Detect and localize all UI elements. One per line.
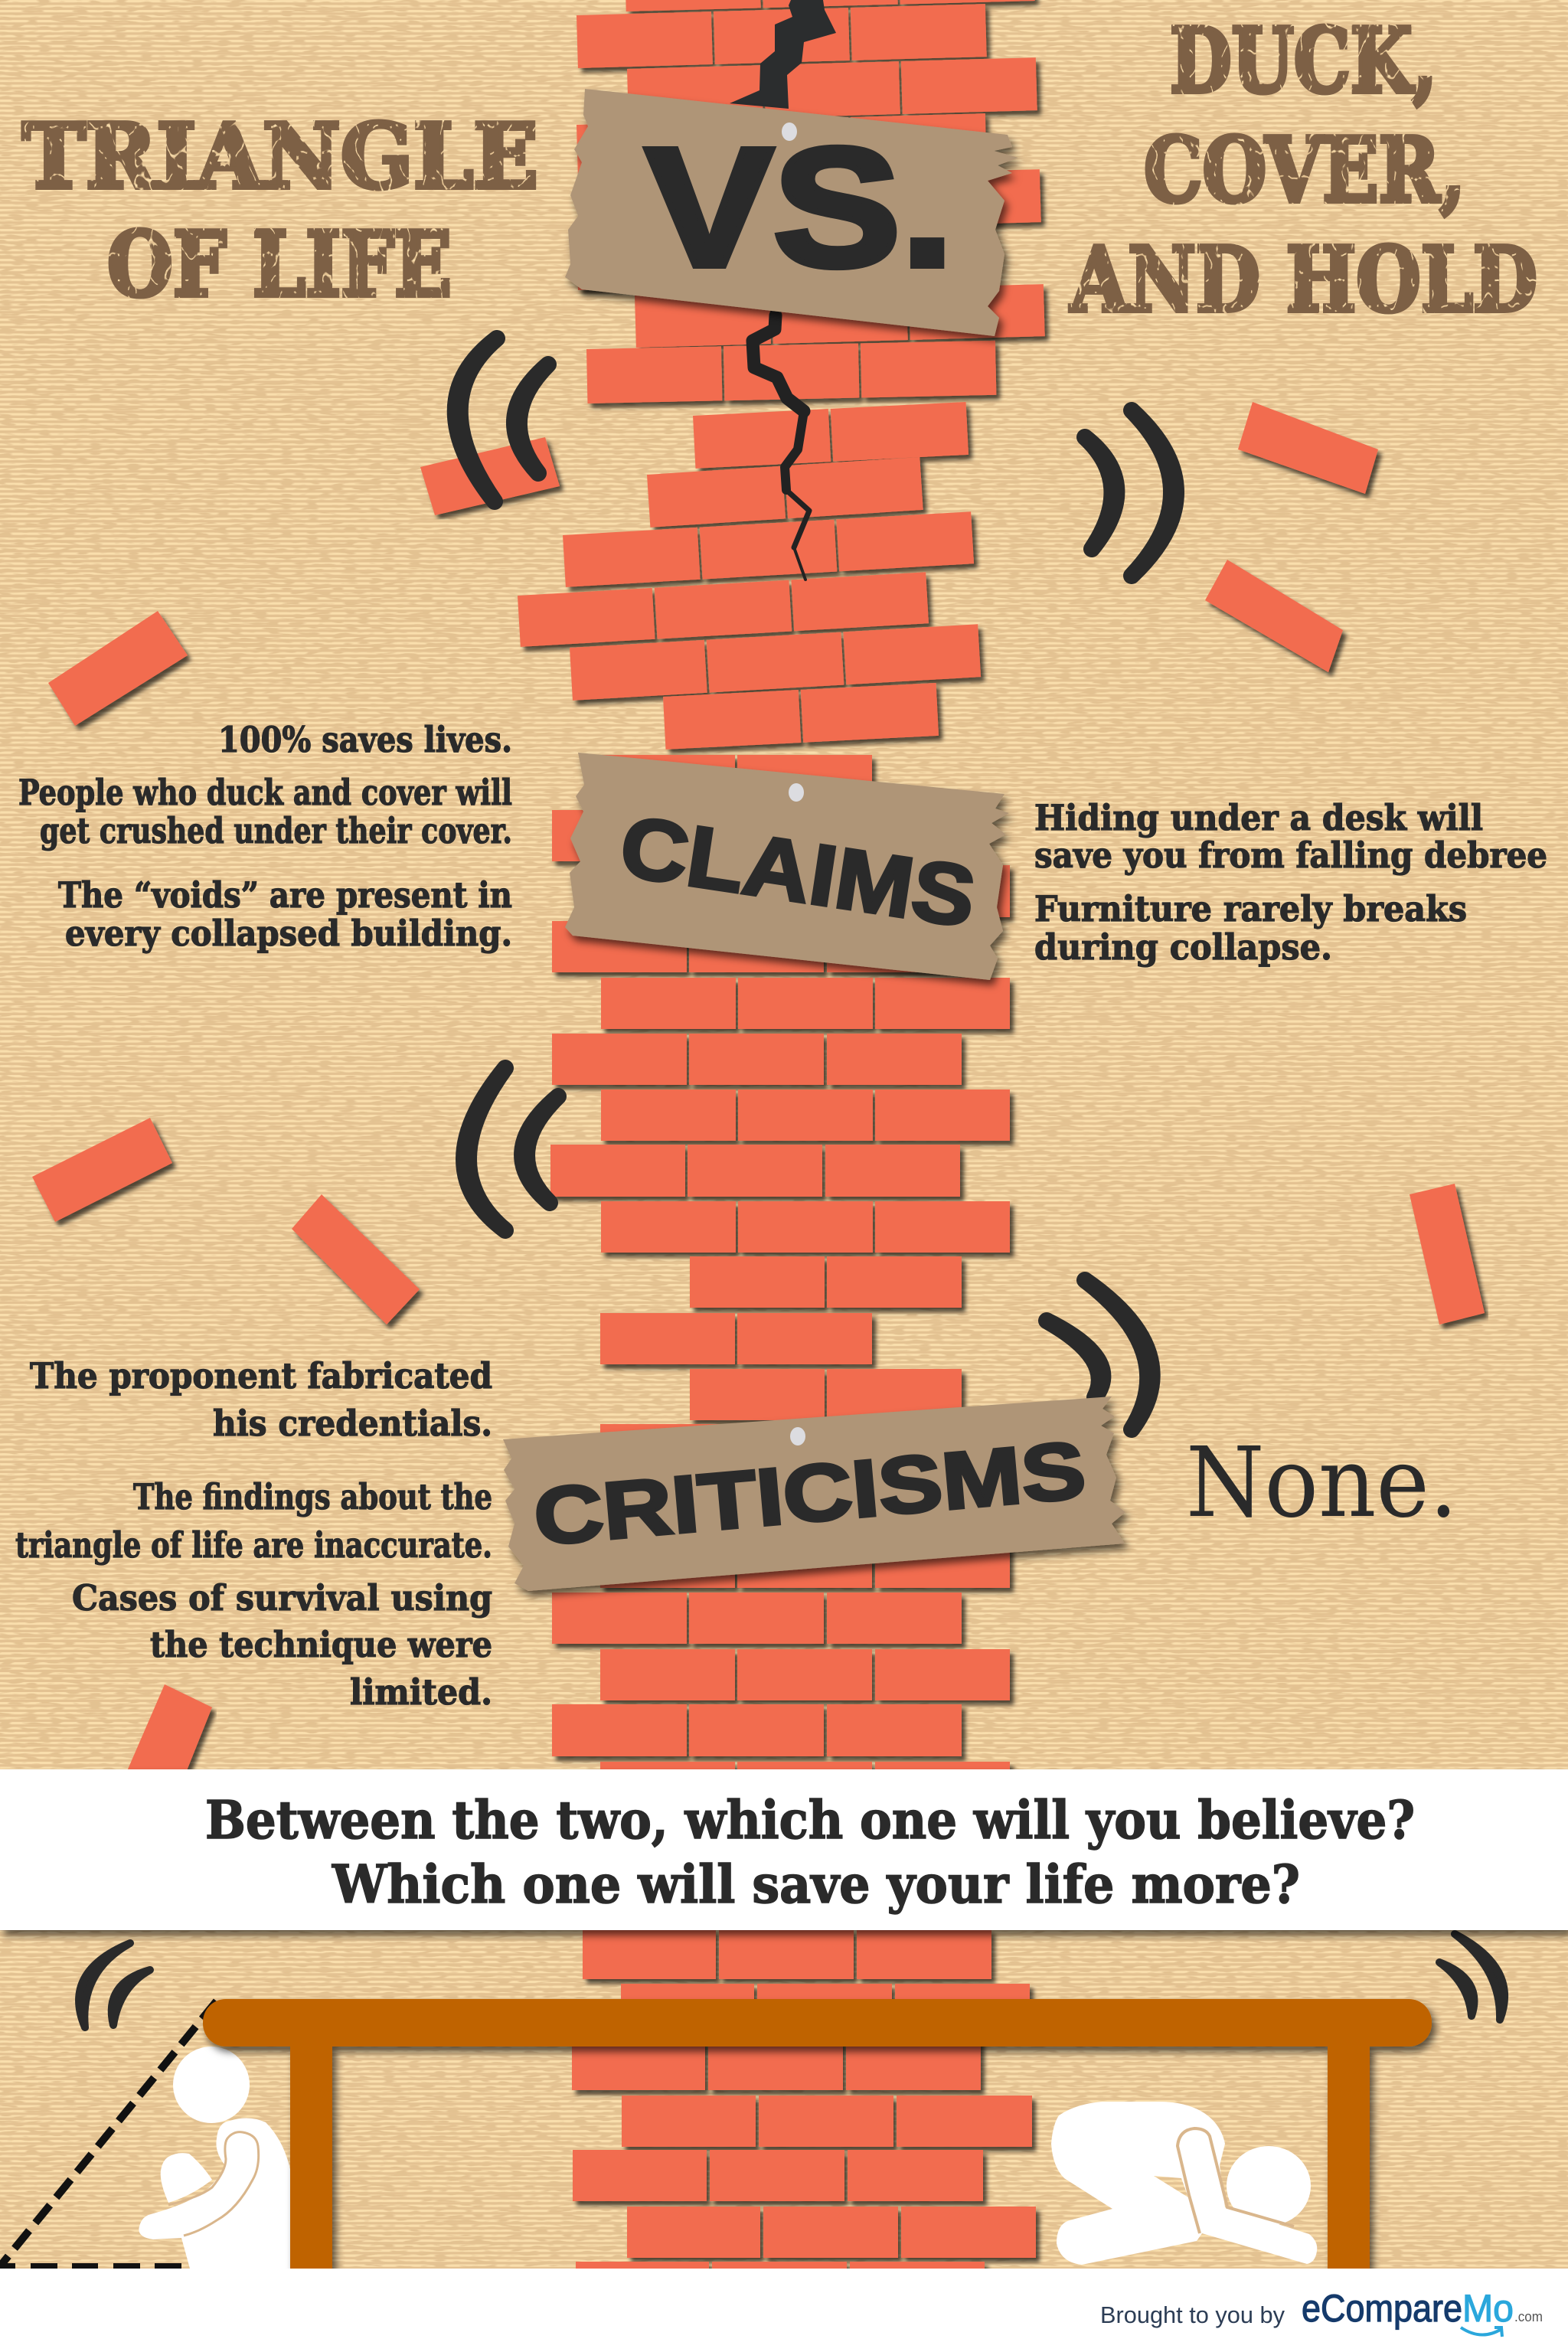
icon: shake marks top right	[1085, 410, 1176, 576]
icon: triangle of life dashed line	[0, 1999, 218, 2266]
loose brick: lower left	[125, 1684, 212, 1776]
heading: Triangle of Life: OF LIFE	[107, 213, 452, 317]
brick row	[573, 2150, 983, 2201]
brick row	[586, 341, 996, 403]
icon: shake marks middle right	[1047, 1280, 1152, 1429]
brick row	[577, 226, 987, 290]
text: Duck, Cover, and Hold claims	[1034, 797, 1547, 968]
loose brick: under left shake marks	[420, 437, 560, 515]
brick row	[600, 755, 872, 806]
brick row	[563, 511, 974, 587]
nail	[782, 122, 797, 141]
icon: shake marks bottom left	[79, 1943, 150, 2027]
question banner	[0, 1769, 1568, 1930]
brick row	[552, 1592, 962, 1644]
brick row	[600, 1762, 1010, 1813]
logo: eCompareMo: eCompare	[1302, 2287, 1462, 2330]
text: Triangle of Life claims	[18, 719, 512, 954]
brick row	[577, 113, 987, 178]
desk top	[203, 1999, 1432, 2047]
question banner: Which one will save your life more?	[332, 1854, 1300, 1916]
brick row	[601, 1201, 1010, 1253]
brick row	[552, 921, 962, 972]
text: Triangle of Life criticisms: The findings about the	[133, 1476, 492, 1517]
sign: Criticisms	[503, 1396, 1125, 1591]
text: Triangle of Life claims: People who duck and cover will	[18, 772, 512, 813]
brick row	[621, 1984, 1030, 2034]
sign label: VS.	[645, 113, 954, 302]
desk	[203, 1999, 1432, 2269]
text: Triangle of Life criticisms: limited.	[350, 1671, 492, 1713]
loose brick: middle left	[32, 1118, 172, 1222]
brick row	[572, 2039, 981, 2090]
brick row	[647, 457, 923, 528]
icon: shake marks bottom right	[1439, 1934, 1504, 2020]
brick wall: straight middle section	[550, 755, 1010, 1813]
heading: Triangle of Life: TRIANGLE	[22, 105, 538, 209]
brick row	[627, 57, 1037, 122]
text: Triangle of Life criticisms: his credentials.	[213, 1403, 492, 1444]
brick row	[625, 0, 1035, 11]
brick row	[552, 1034, 962, 1085]
brick row	[600, 1424, 872, 1475]
loose brick: upper left	[48, 611, 188, 726]
sign board	[565, 753, 1009, 980]
text: Triangle of Life criticisms	[15, 1355, 492, 1713]
brick wall: upper cracked section	[518, 0, 1045, 750]
text: Duck, Cover, and Hold claims: Furniture rarely breaks	[1034, 888, 1467, 929]
brick row	[622, 2096, 1032, 2147]
brought to you by: Brought to you by	[1100, 2301, 1285, 2328]
heading: Duck, Cover, and Hold	[1070, 9, 1537, 332]
question banner: Between the two, which one will you believe?	[205, 1790, 1415, 1851]
brick row	[601, 1089, 1010, 1141]
brick row	[552, 1481, 962, 1532]
brick row	[690, 1256, 962, 1308]
sign: VS	[565, 89, 1018, 336]
text: Triangle of Life claims: The “voids” are present in	[58, 874, 512, 916]
sign label: CLAIMS	[614, 798, 982, 946]
brick row	[631, 169, 1041, 234]
icon: person sitting beside the desk	[139, 2047, 290, 2269]
brick row	[550, 1145, 960, 1197]
brick row	[552, 1704, 962, 1756]
sign board	[565, 89, 1018, 336]
brick row	[627, 2207, 1036, 2258]
text: Duck, Cover, and Hold criticisms: None.	[1186, 1426, 1458, 1539]
icon: shake marks top left	[456, 338, 548, 501]
nail	[789, 783, 804, 802]
brick row	[600, 1649, 1010, 1700]
icon: shake marks middle left	[464, 1068, 558, 1230]
heading: Triangle of Life	[22, 105, 538, 317]
brick row	[663, 683, 939, 750]
brick row	[601, 978, 1010, 1029]
text: Triangle of Life criticisms: Cases of survival using	[72, 1577, 492, 1619]
crack: upper part of the wall	[730, 0, 836, 109]
nail	[790, 1427, 805, 1446]
brick row	[577, 4, 987, 68]
text: Duck, Cover, and Hold claims: Hiding under a desk will	[1034, 797, 1483, 838]
brick row	[693, 402, 969, 469]
brick row	[576, 2262, 985, 2285]
logo: eCompareMo: .com	[1514, 2309, 1543, 2324]
desk leg right	[1328, 2029, 1370, 2269]
brick row	[601, 865, 1010, 917]
sign label: CRITICISMS	[531, 1425, 1089, 1563]
loose brick: middle right	[1410, 1184, 1485, 1325]
loose brick: middle left tilted	[292, 1194, 420, 1325]
text: Triangle of Life criticisms: The proponent fabricated	[30, 1355, 492, 1396]
loose brick: upper right	[1238, 402, 1378, 494]
desk leg left	[290, 2029, 332, 2269]
footer strip	[0, 2269, 1568, 2352]
brick row	[518, 572, 929, 647]
brick row	[600, 1313, 872, 1364]
heading: Duck, Cover, and Hold: COVER,	[1144, 119, 1465, 223]
brick row	[552, 810, 962, 861]
text: Triangle of Life claims: get crushed under their cover.	[40, 810, 512, 851]
text: Triangle of Life claims: every collapsed building.	[65, 913, 512, 954]
sign board	[503, 1396, 1125, 1591]
brick row	[570, 624, 981, 701]
logo: eCompareMo	[1302, 2287, 1543, 2337]
crack: lower part of the wall	[753, 315, 809, 580]
brick row	[600, 1537, 1010, 1588]
brick row	[690, 1369, 962, 1420]
logo: eCompareMo: Mo	[1462, 2287, 1514, 2330]
brick row	[583, 1929, 991, 1979]
text: Triangle of Life claims: 100% saves lives.	[218, 719, 512, 760]
text: Triangle of Life criticisms: the technique were	[150, 1624, 492, 1665]
icon: person crouching under the desk	[1051, 2102, 1317, 2265]
text: Triangle of Life criticisms: triangle of life are inaccurate.	[15, 1524, 492, 1566]
sign: Claims	[565, 753, 1009, 980]
brick row	[635, 284, 1045, 348]
text: Duck, Cover, and Hold claims: during collapse.	[1034, 926, 1332, 968]
heading: Duck, Cover, and Hold: DUCK,	[1170, 9, 1437, 113]
brick wall: lower section behind the desk	[572, 1929, 1036, 2285]
loose brick: right	[1205, 560, 1343, 672]
